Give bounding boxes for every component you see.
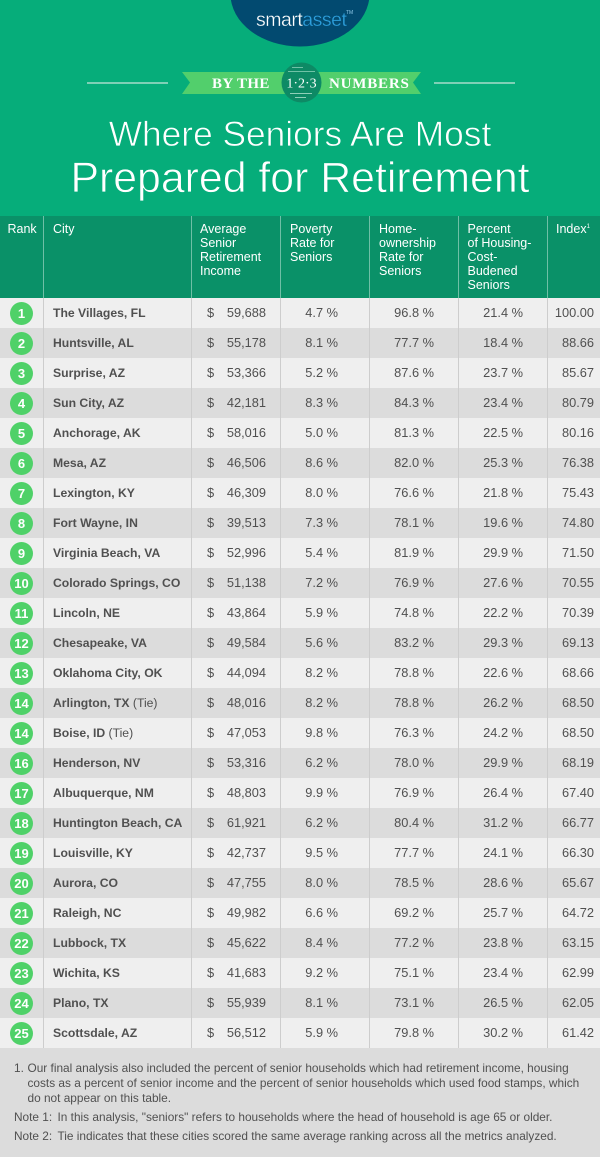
row 21: $ (207, 905, 214, 920)
row 15: 14 (14, 726, 29, 740)
row 3: 85.67 (562, 365, 594, 380)
row 11: Lincoln, NE (53, 606, 120, 620)
row 13: 78.8 % (394, 665, 434, 680)
row 15: 9.8 % (305, 725, 338, 740)
header: housing cost: Percent (468, 222, 511, 236)
row 3: 23.7 % (483, 365, 523, 380)
row 3: 87.6 % (394, 365, 434, 380)
row 15 (0, 718, 600, 748)
row 22: 22 (14, 936, 29, 950)
row 18: Huntington Beach, CA (53, 816, 182, 830)
row 10: 70.55 (562, 575, 594, 590)
row 25: 79.8 % (394, 1025, 434, 1040)
header: income: Retirement (200, 250, 261, 264)
header: index: Index1 (556, 222, 590, 236)
note 1: Note 1: (14, 1110, 52, 1124)
header: rank: Rank (8, 222, 37, 236)
row 2: 55,178 (227, 335, 266, 350)
row 16: 29.9 % (483, 755, 523, 770)
row 20: 8.0 % (305, 875, 338, 890)
row 23: 41,683 (227, 965, 266, 980)
header: income: Senior (200, 236, 236, 250)
row 21 (0, 898, 600, 928)
row 25: 5.9 % (305, 1025, 338, 1040)
footnotes panel (0, 1048, 600, 1157)
row 13: 68.66 (562, 665, 594, 680)
row 7 (0, 478, 600, 508)
row 17: 67.40 (562, 785, 594, 800)
row 6 (0, 448, 600, 478)
row 2 (0, 328, 600, 358)
row 15: 24.2 % (483, 725, 523, 740)
note 2: Tie indicates that these cities scored the same average ranking across all the metrics analyzed. (58, 1128, 557, 1142)
row 2: Huntsville, AL (53, 336, 134, 350)
row 11 (0, 598, 600, 628)
row 22: Lubbock, TX (53, 936, 126, 950)
row 3: $ (207, 365, 214, 380)
row 5: 5.0 % (305, 425, 338, 440)
logo badge: smartasset (256, 9, 346, 31)
header: housing cost: of Housing- (468, 236, 531, 250)
row 8: 74.80 (562, 515, 594, 530)
row 14: 68.50 (562, 695, 594, 710)
row 6: 8.6 % (305, 455, 338, 470)
row 21: 64.72 (562, 905, 594, 920)
row 19: 24.1 % (483, 845, 523, 860)
row 5: 58,016 (227, 425, 266, 440)
row 12: 12 (14, 636, 29, 650)
row 19: Louisville, KY (53, 846, 133, 860)
row 22: $ (207, 935, 214, 950)
row 21: 6.6 % (305, 905, 338, 920)
row 25: 25 (14, 1026, 29, 1040)
row 16: 16 (14, 756, 29, 770)
row 1: The Villages, FL (53, 306, 146, 320)
note 1: In this analysis, "seniors" refers to households where the head of household is age 65 or older. (58, 1110, 552, 1124)
row 19: 19 (14, 846, 29, 860)
row 24 (0, 988, 600, 1018)
row 12 (0, 628, 600, 658)
row 8: 39,513 (227, 515, 266, 530)
row 25 (0, 1018, 600, 1048)
row 9: 5.4 % (305, 545, 338, 560)
row 3: 3 (18, 366, 25, 380)
row 7: 8.0 % (305, 485, 338, 500)
header: homeownership: Home- (379, 222, 417, 236)
row 2: 8.1 % (305, 335, 338, 350)
row 18: 80.4 % (394, 815, 434, 830)
by the numbers banner: 1·2·3 (286, 76, 317, 92)
row 17: 17 (14, 786, 29, 800)
row 25: 61.42 (562, 1025, 594, 1040)
header: poverty: Seniors (290, 250, 332, 264)
row 3 (0, 358, 600, 388)
row 8: Fort Wayne, IN (53, 516, 138, 530)
header: housing cost: Seniors (468, 278, 510, 292)
row 9: 9 (18, 546, 25, 560)
row 8: 19.6 % (483, 515, 523, 530)
note 2: Note 2: (14, 1128, 52, 1142)
row 6: 25.3 % (483, 455, 523, 470)
row 7: 75.43 (562, 485, 594, 500)
row 4: Sun City, AZ (53, 396, 124, 410)
row 14 (0, 688, 600, 718)
footnote 1: costs as a percent of senior income and the percent of senior households which used food stamps, which (28, 1076, 579, 1090)
row 18: 6.2 % (305, 815, 338, 830)
row 10: 76.9 % (394, 575, 434, 590)
row 8: 78.1 % (394, 515, 434, 530)
title line 1: Where Seniors Are Most (109, 115, 491, 154)
row 14: 48,016 (227, 695, 266, 710)
row 20: 47,755 (227, 875, 266, 890)
row 4: 23.4 % (483, 395, 523, 410)
row 1: 96.8 % (394, 305, 434, 320)
row 23: 62.99 (562, 965, 594, 980)
row 11: 5.9 % (305, 605, 338, 620)
row 17 (0, 778, 600, 808)
row 10: Colorado Springs, CO (53, 576, 180, 590)
row 23 (0, 958, 600, 988)
row 20: $ (207, 875, 214, 890)
by the numbers banner: BY THE (212, 76, 270, 92)
row 6: 6 (18, 456, 25, 470)
row 7: 76.6 % (394, 485, 434, 500)
row 4 (0, 388, 600, 418)
row 16: 6.2 % (305, 755, 338, 770)
row 24: 55,939 (227, 995, 266, 1010)
row 19: 9.5 % (305, 845, 338, 860)
row 13: 13 (14, 666, 29, 680)
row 12: 29.3 % (483, 635, 523, 650)
row 1 (0, 298, 600, 328)
row 12: $ (207, 635, 214, 650)
row 8 (0, 508, 600, 538)
row 1: $ (207, 305, 214, 320)
row 22: 63.15 (562, 935, 594, 950)
table header (0, 216, 600, 298)
row 16: 68.19 (562, 755, 594, 770)
row 11: 70.39 (562, 605, 594, 620)
footnote 1: Our final analysis also included the percent of senior households which had retirement income, housing (28, 1060, 569, 1074)
row 20: Aurora, CO (53, 876, 118, 890)
row 15: $ (207, 725, 214, 740)
row 20: 65.67 (562, 875, 594, 890)
row 1: 21.4 % (483, 305, 523, 320)
row 12: 5.6 % (305, 635, 338, 650)
row 24: 8.1 % (305, 995, 338, 1010)
title line 2: Prepared for Retirement (70, 154, 530, 202)
row 5: 80.16 (562, 425, 594, 440)
row 11: $ (207, 605, 214, 620)
header: housing cost: Cost- (468, 250, 497, 264)
row 9: 52,996 (227, 545, 266, 560)
row 18: 61,921 (227, 815, 266, 830)
row 25: 56,512 (227, 1025, 266, 1040)
row 13: $ (207, 665, 214, 680)
row 8: 8 (18, 516, 25, 530)
header: housing cost (468, 222, 531, 292)
row 13 (0, 658, 600, 688)
row 5: 22.5 % (483, 425, 523, 440)
by the numbers banner: NUMBERS (329, 76, 410, 92)
row 1: 1 (18, 306, 25, 320)
logo badge (231, 0, 369, 46)
row 20: 78.5 % (394, 875, 434, 890)
row 18: 66.77 (562, 815, 594, 830)
row 17: $ (207, 785, 214, 800)
row 24: 26.5 % (483, 995, 523, 1010)
row 17: 26.4 % (483, 785, 523, 800)
row 1: 4.7 % (305, 305, 338, 320)
footnote 1: 1. (14, 1060, 24, 1074)
row 15: 76.3 % (394, 725, 434, 740)
row 4: 8.3 % (305, 395, 338, 410)
row 13: Oklahoma City, OK (53, 666, 162, 680)
header: income (200, 222, 261, 278)
row 7: 7 (18, 486, 25, 500)
row 6: $ (207, 455, 214, 470)
row 21: 25.7 % (483, 905, 523, 920)
row 1: 59,688 (227, 305, 266, 320)
row 5: Anchorage, AK (53, 426, 141, 440)
row 14: 78.8 % (394, 695, 434, 710)
row 21: 69.2 % (394, 905, 434, 920)
by the numbers banner (87, 62, 515, 102)
row 9: $ (207, 545, 214, 560)
row 20 (0, 868, 600, 898)
row 7: Lexington, KY (53, 486, 135, 500)
row 10: $ (207, 575, 214, 590)
row 23: Wichita, KS (53, 966, 120, 980)
footnote 1 (14, 1060, 579, 1104)
row 4: 4 (18, 396, 25, 410)
row 10: 7.2 % (305, 575, 338, 590)
row 15: Boise, ID (Tie) (53, 726, 133, 740)
header: income: Income (200, 264, 241, 278)
row 8: $ (207, 515, 214, 530)
row 14: Arlington, TX (Tie) (53, 696, 158, 710)
header: housing cost: Budened (468, 264, 518, 278)
row 17: 48,803 (227, 785, 266, 800)
header: poverty: Poverty (290, 222, 332, 236)
row 10: 27.6 % (483, 575, 523, 590)
row 15: 68.50 (562, 725, 594, 740)
row 11: 74.8 % (394, 605, 434, 620)
row 20: 20 (14, 876, 29, 890)
row 5: 81.3 % (394, 425, 434, 440)
row 4: $ (207, 395, 214, 410)
row 23: 9.2 % (305, 965, 338, 980)
header: homeownership: Seniors (379, 264, 421, 278)
row 24: 73.1 % (394, 995, 434, 1010)
row 2: 77.7 % (394, 335, 434, 350)
row 16: 78.0 % (394, 755, 434, 770)
row 23: 75.1 % (394, 965, 434, 980)
row 9: Virginia Beach, VA (53, 546, 160, 560)
row 4: 84.3 % (394, 395, 434, 410)
row 19: 66.30 (562, 845, 594, 860)
row 12: Chesapeake, VA (53, 636, 147, 650)
row 24: Plano, TX (53, 996, 109, 1010)
row 22 (0, 928, 600, 958)
row 4: 42,181 (227, 395, 266, 410)
row 17: Albuquerque, NM (53, 786, 154, 800)
row 12: 83.2 % (394, 635, 434, 650)
row 16 (0, 748, 600, 778)
row 22: 23.8 % (483, 935, 523, 950)
row 3: Surprise, AZ (53, 366, 125, 380)
row 7: 46,309 (227, 485, 266, 500)
row 19 (0, 838, 600, 868)
row 6: Mesa, AZ (53, 456, 106, 470)
header: city: City (53, 222, 75, 236)
header: homeownership (379, 222, 436, 278)
row 21: 21 (14, 906, 29, 920)
row 23: $ (207, 965, 214, 980)
row 14: 8.2 % (305, 695, 338, 710)
row 11: 22.2 % (483, 605, 523, 620)
row 24: 62.05 (562, 995, 594, 1010)
row 6: 82.0 % (394, 455, 434, 470)
row 12: 49,584 (227, 635, 266, 650)
row 11: 11 (15, 606, 28, 620)
row 10: 51,138 (227, 575, 266, 590)
row 21: Raleigh, NC (53, 906, 121, 920)
row 19: 77.7 % (394, 845, 434, 860)
header: poverty: Rate for (290, 236, 334, 250)
row 5: $ (207, 425, 214, 440)
row 17: 76.9 % (394, 785, 434, 800)
row 14: $ (207, 695, 214, 710)
row 2: 2 (18, 336, 25, 350)
row 21: 49,982 (227, 905, 266, 920)
row 18 (0, 808, 600, 838)
header: homeownership: Rate for (379, 250, 423, 264)
row 22: 8.4 % (305, 935, 338, 950)
row 25: $ (207, 1025, 214, 1040)
row 16: $ (207, 755, 214, 770)
row 9: 81.9 % (394, 545, 434, 560)
row 4: 80.79 (562, 395, 594, 410)
row 6: 46,506 (227, 455, 266, 470)
logo badge: TM (346, 10, 353, 16)
row 2: $ (207, 335, 214, 350)
row 9: 71.50 (562, 545, 594, 560)
row 11: 43,864 (227, 605, 266, 620)
row 5: 5 (18, 426, 25, 440)
row 2: 88.66 (562, 335, 594, 350)
row 22: 45,622 (227, 935, 266, 950)
row 7: $ (207, 485, 214, 500)
row 12: 69.13 (562, 635, 594, 650)
footnote 1: do not appear on this table. (28, 1090, 171, 1104)
row 9: 29.9 % (483, 545, 523, 560)
row 5 (0, 418, 600, 448)
row 16: 53,316 (227, 755, 266, 770)
header: income: Average (200, 222, 246, 236)
row 24: 24 (14, 996, 29, 1010)
row 3: 53,366 (227, 365, 266, 380)
row 13: 22.6 % (483, 665, 523, 680)
row 18: 18 (14, 816, 29, 830)
row 6: 76.38 (562, 455, 594, 470)
header: homeownership: ownership (379, 236, 436, 250)
row 13: 8.2 % (305, 665, 338, 680)
row 8: 7.3 % (305, 515, 338, 530)
row 16: Henderson, NV (53, 756, 140, 770)
row 19: 42,737 (227, 845, 266, 860)
row 13: 44,094 (227, 665, 266, 680)
header: poverty (290, 222, 334, 264)
row 19: $ (207, 845, 214, 860)
row 23: 23.4 % (483, 965, 523, 980)
row 20: 28.6 % (483, 875, 523, 890)
row 22: 77.2 % (394, 935, 434, 950)
row 10 (0, 568, 600, 598)
row 23: 23 (14, 966, 29, 980)
row 14: 26.2 % (483, 695, 523, 710)
row 9 (0, 538, 600, 568)
row 15: 47,053 (227, 725, 266, 740)
row 18: $ (207, 815, 214, 830)
row 25: 30.2 % (483, 1025, 523, 1040)
row 25: Scottsdale, AZ (53, 1026, 137, 1040)
row 2: 18.4 % (483, 335, 523, 350)
row 17: 9.9 % (305, 785, 338, 800)
row 1: 100.00 (555, 305, 594, 320)
row 3: 5.2 % (305, 365, 338, 380)
row 7: 21.8 % (483, 485, 523, 500)
row 18: 31.2 % (483, 815, 523, 830)
row 14: 14 (14, 696, 29, 710)
row 24: $ (207, 995, 214, 1010)
row 10: 10 (14, 576, 29, 590)
